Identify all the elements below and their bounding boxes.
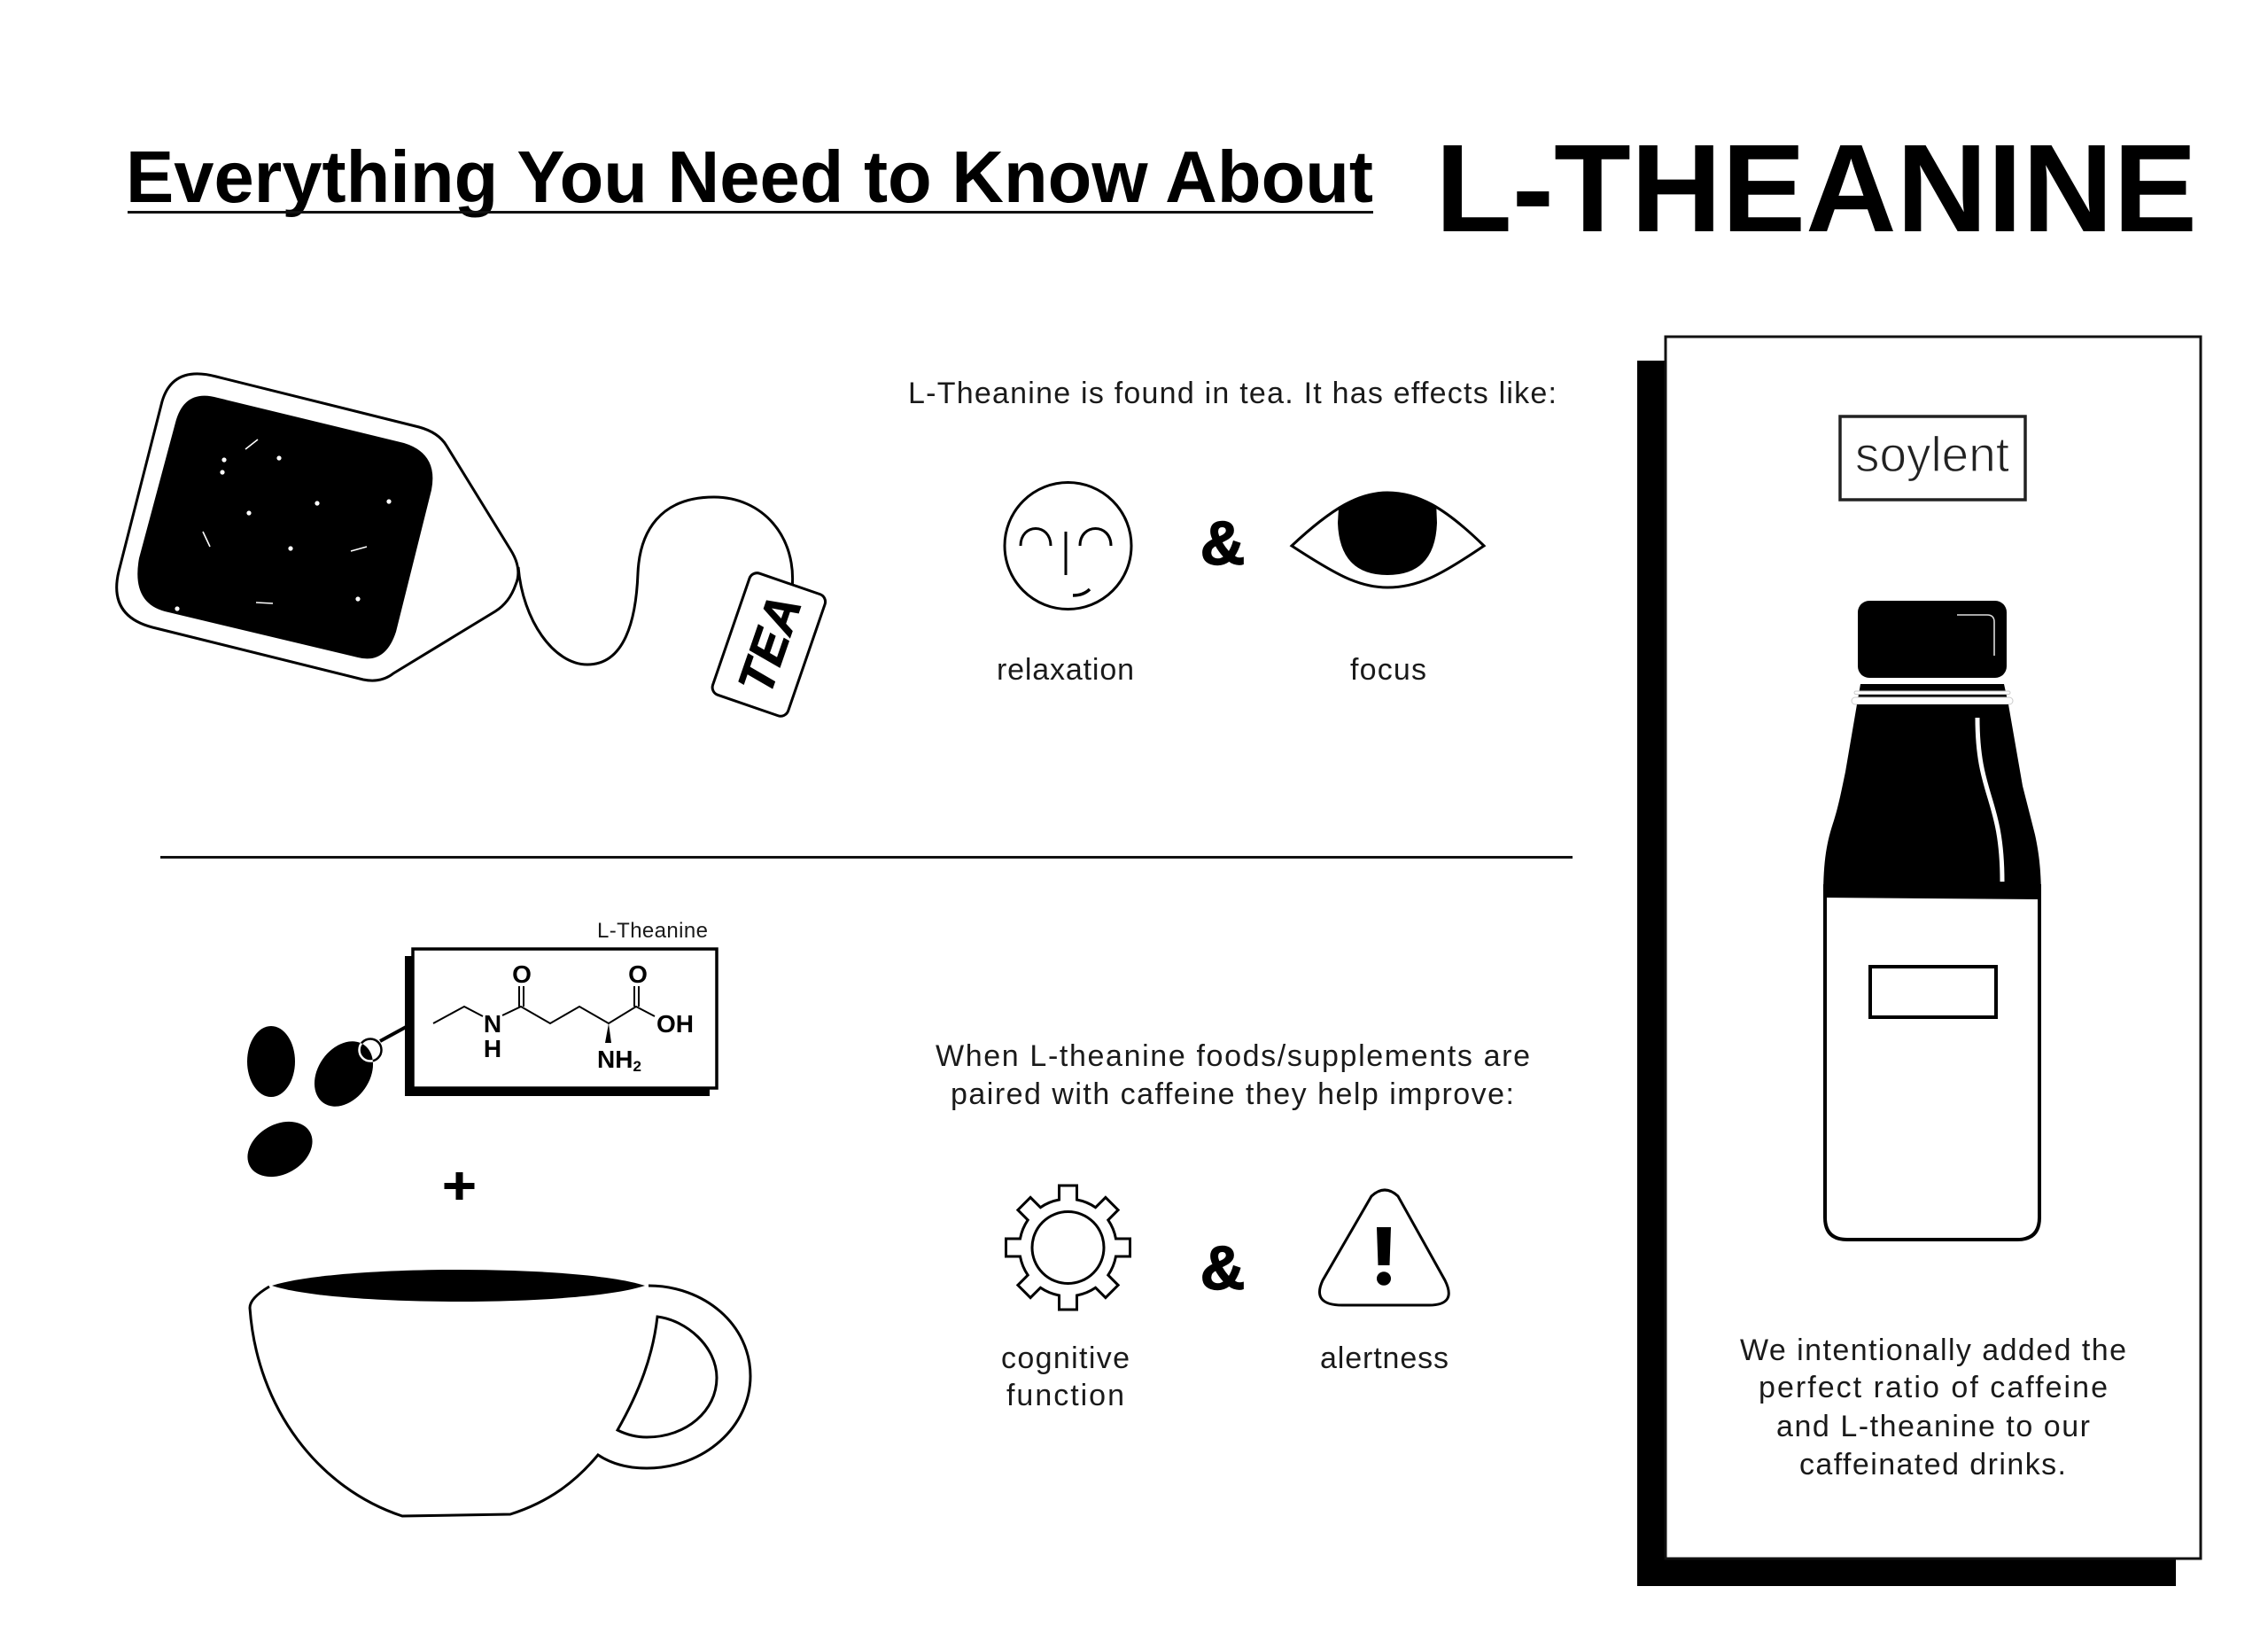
- molecule label: L-Theanine: [597, 919, 708, 943]
- text: cognitive function: [1001, 1341, 1130, 1412]
- molecule structure: NH: [597, 1046, 633, 1073]
- illustration: tea bag: [117, 374, 827, 719]
- card caption: and L-theanine to our: [1776, 1410, 2090, 1443]
- bottle illustration: [1823, 601, 2041, 1240]
- tea bag leaves window: [137, 396, 432, 658]
- coffee surface: [272, 1270, 645, 1302]
- tea bag body: [117, 374, 518, 680]
- molecule structure: H: [484, 1035, 501, 1062]
- ampersand: &: [1200, 509, 1245, 578]
- card caption: We intentionally added the: [1740, 1334, 2126, 1367]
- icon: eye: [1292, 478, 1484, 587]
- icon: alert triangle: [1319, 1190, 1449, 1305]
- bottle lower body: [1825, 886, 2039, 1240]
- icon: relaxed face: [1005, 482, 1131, 610]
- bottle highlight: [1977, 718, 2002, 882]
- text: alertness: alertness: [1320, 1341, 1449, 1375]
- magnifier ring: [360, 1038, 381, 1061]
- molecule box: [413, 949, 717, 1088]
- bottle cap: [1858, 601, 2007, 678]
- cup outline: [250, 1286, 750, 1516]
- eye pupil: [1338, 494, 1437, 575]
- molecule structure: N: [484, 1010, 501, 1038]
- text: paired with caffeine: [936, 1039, 1530, 1111]
- text: cognitive function: function: [1006, 1379, 1124, 1412]
- illustration: beans and molecule: [237, 919, 717, 1188]
- bottle label: [1870, 967, 1996, 1017]
- molecule box shadow: [405, 956, 710, 1096]
- bottle neck: [1857, 684, 2008, 704]
- molecule structure: 2: [633, 1058, 641, 1075]
- neck rings: [1852, 691, 2013, 704]
- soylent logo: [1840, 416, 2025, 500]
- bean left: [247, 1026, 295, 1097]
- tea bag tag: [711, 571, 827, 719]
- eye outline: [1292, 493, 1484, 587]
- soylent logo: soylent: [1855, 426, 2009, 482]
- magnifier connector: [380, 1025, 409, 1041]
- section divider: [160, 856, 1573, 859]
- tea bag string: [518, 497, 793, 665]
- title: lead-in heading: Everything You Need to Know About: [126, 136, 1373, 218]
- card: [1666, 337, 2201, 1559]
- text: cognitive function: cognitive: [1001, 1341, 1130, 1375]
- text: focus: focus: [1350, 653, 1426, 687]
- plus sign: [445, 1172, 475, 1200]
- illustration: coffee cup: [250, 1270, 750, 1516]
- text: effects intro: L-Theanine is found in tea. It has effects like:: [908, 377, 1557, 410]
- ampersand: &: [1200, 1233, 1245, 1303]
- card caption: [1740, 1334, 2126, 1481]
- text: paired with caffeine: When L-theanine foods/supplements are: [936, 1039, 1530, 1073]
- molecule structure: [433, 960, 694, 1075]
- bean with magnifier: [302, 1030, 385, 1117]
- icon: gear: [1006, 1186, 1130, 1310]
- title: underline: [128, 211, 1373, 214]
- panel: soylent card: [1637, 337, 2201, 1586]
- cap highlight: [1957, 615, 1994, 656]
- card caption: caffeinated drinks.: [1799, 1448, 2066, 1481]
- tea leaf specks: [175, 439, 391, 610]
- molecule structure: O: [628, 960, 648, 988]
- bottle dark fill: [1823, 704, 2041, 899]
- bean lower: [237, 1110, 322, 1188]
- title: [126, 118, 2197, 258]
- card shadow: [1637, 361, 2176, 1586]
- title: L-Theanine: L-THEANINE: [1435, 118, 2197, 258]
- text: relaxation: relaxation: [997, 653, 1134, 687]
- molecule structure: OH: [656, 1010, 694, 1038]
- card caption: perfect ratio of caffeine: [1759, 1371, 2108, 1404]
- molecule structure: O: [512, 960, 532, 988]
- tea bag tag: TEA: [726, 588, 812, 700]
- text: paired with caffeine: paired with caffeine they help improve:: [951, 1077, 1514, 1111]
- cup handle inner: [617, 1317, 717, 1437]
